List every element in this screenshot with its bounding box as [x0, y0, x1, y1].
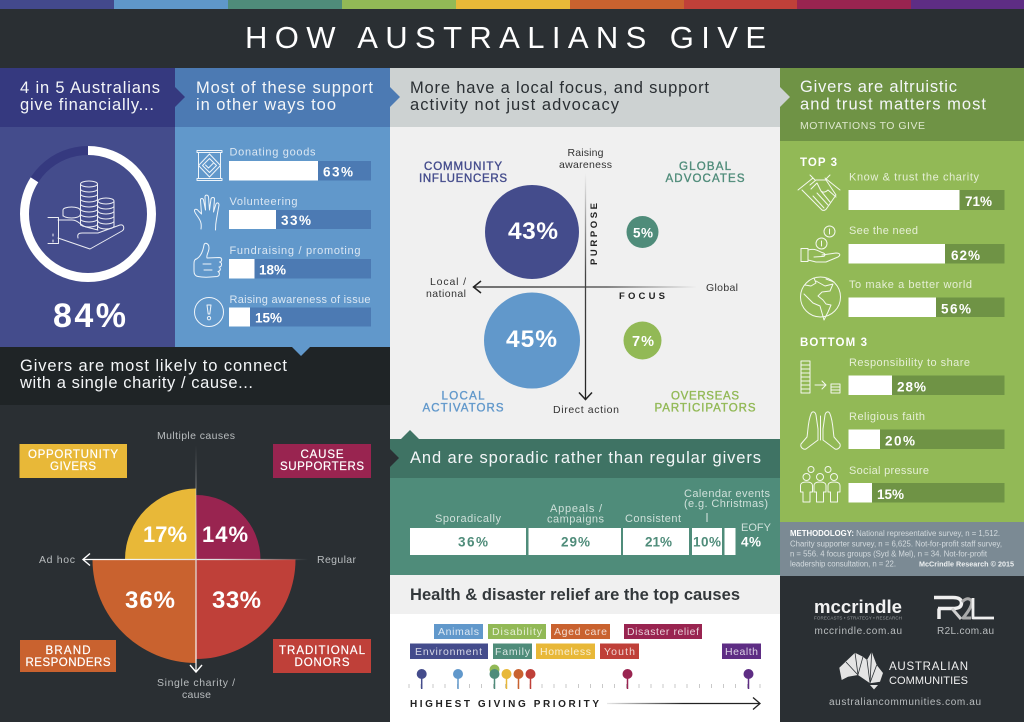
segment labels: INFLUENCERS [419, 173, 507, 185]
logo: Australian Communities: australiancommunities.com.au [829, 697, 981, 708]
heading: Health & disaster relief are the top causes [410, 586, 740, 604]
heading: And are sporadic rather than regular givers [410, 449, 761, 467]
axis labels: Single charity / [157, 677, 235, 689]
segment: cause supporters [196, 495, 260, 560]
label: brand responders: BRAND [46, 645, 90, 657]
bar: donating goods [229, 146, 371, 180]
segment labels: ADVOCATES [666, 173, 745, 185]
bar: religious faith [848, 411, 1004, 449]
label: cause supporters: CAUSE [300, 449, 344, 461]
label: traditional donors [273, 639, 371, 673]
segment: EOFY: EOFY [741, 522, 772, 534]
segment labels [419, 161, 756, 414]
label: opportunity givers: GIVERS [50, 461, 96, 473]
pointer [292, 347, 310, 356]
cause tags: Disaster relief [627, 626, 699, 638]
pointer [780, 87, 790, 107]
segment: calendar events: (e.g. Christmas) [684, 498, 768, 510]
heading: Givers are most likely to connect [20, 357, 287, 375]
segment: brand responders: 36% [125, 587, 175, 614]
axis labels: Local / [430, 276, 466, 288]
bar: raising awareness: Raising awareness of issue [230, 294, 370, 306]
icon: praying hands [801, 412, 840, 449]
segment: sporadically: Sporadically [435, 513, 502, 525]
axis labels [39, 430, 356, 701]
axis labels: Ad hoc [39, 554, 75, 566]
segment: consistent [623, 513, 689, 555]
cause tags: Youth [604, 646, 635, 658]
credit: McCrindle Research © 2015 [919, 560, 1014, 568]
segment: consistent: 21% [645, 534, 672, 550]
bar: better world: To make a better world [849, 279, 972, 291]
label: cause supporters [273, 444, 371, 478]
segment labels: GLOBAL [679, 161, 732, 173]
axes [83, 445, 308, 672]
quadrant chart [419, 147, 756, 416]
panel: motivations [780, 68, 1024, 522]
icon: people [800, 466, 840, 502]
arrow [607, 698, 760, 710]
axis labels: Global [706, 282, 738, 294]
circle: global advocates: 5% [633, 226, 653, 240]
segment: calendar events: Calendar events [684, 488, 770, 500]
bar: volunteering [229, 196, 371, 229]
logo: Australian Communities: AUSTRALIAN [889, 661, 968, 673]
logo: Australian Communities: COMMUNITIES [889, 675, 968, 687]
icon: thumbs up [194, 243, 222, 277]
label: opportunity givers: OPPORTUNITY [28, 449, 118, 461]
axis labels [426, 147, 738, 416]
panel: logos [780, 576, 1024, 722]
bar: see the need: 62% [951, 248, 980, 263]
heading: Most of these support [196, 79, 373, 97]
segment: opportunity givers [125, 488, 196, 560]
pins [417, 664, 754, 689]
label: opportunity givers [20, 444, 127, 478]
bar: fundraising: Fundraising / promoting [230, 245, 360, 257]
title: HOW AUSTRALIANS GIVE [245, 20, 766, 55]
segment: appeals: Appeals / [550, 503, 603, 515]
priority scale [409, 664, 760, 710]
bar: volunteering: 33% [281, 213, 311, 228]
segment labels: LOCAL [442, 390, 485, 402]
panel: methodology [780, 522, 1024, 576]
cause tags: Health [725, 646, 758, 658]
axis labels: Direct action [553, 404, 619, 416]
bar: fundraising: 18% [259, 262, 286, 278]
methodology text: leadership consultation, n = 22. [790, 560, 896, 568]
heading: and trust matters most [800, 96, 986, 114]
logo: R2L [934, 598, 994, 637]
title banner [0, 9, 1024, 68]
circle: community influencers: 43% [508, 218, 558, 245]
cause tags: Homeless [540, 646, 591, 658]
icon: globe [800, 277, 840, 320]
label: traditional donors: DONORS [294, 657, 350, 669]
bar: donating goods: Donating goods [230, 146, 316, 158]
cause tags: Aged care [554, 626, 607, 638]
bar: know and trust: 71% [965, 194, 992, 209]
label: traditional donors: TRADITIONAL [279, 645, 366, 657]
segment: traditional donors: 33% [212, 587, 261, 614]
label: brand responders [20, 640, 116, 672]
bar: see the need: See the need [849, 225, 918, 237]
axes [473, 173, 697, 400]
quarter pie chart [39, 430, 356, 701]
methodology text: n = 556. 4 focus groups (Syd & Mel), n = 34. Not-for-profit [790, 550, 988, 558]
axis labels: national [426, 288, 466, 300]
cause tags: Family [495, 646, 531, 658]
colour stripe [0, 0, 1024, 9]
bar: religious faith: Religious faith [849, 411, 925, 423]
cause tags: Disability [492, 626, 543, 638]
segment: brand responders [92, 560, 196, 663]
bar: know and trust [848, 172, 1004, 210]
logo: R2L: R2L.com.au [937, 626, 994, 637]
bar: better world [848, 279, 1004, 317]
logo: Australian Communities [829, 652, 981, 708]
axis labels: cause [182, 689, 211, 701]
circle: local activators [484, 292, 580, 388]
scale label: HIGHEST GIVING PRIORITY [410, 699, 599, 710]
cause tags: Environment [415, 646, 482, 658]
circle: local activators: 45% [506, 326, 557, 353]
icon: coins share [801, 361, 840, 393]
circle: global advocates [626, 216, 658, 248]
bottom 3 label: BOTTOM 3 [800, 337, 867, 349]
bar: fundraising [229, 245, 371, 278]
axis labels: Raising [568, 147, 604, 159]
icon: hand [194, 195, 219, 230]
segment: calendar events [684, 488, 770, 555]
panel: charity connection [0, 347, 390, 722]
segment: opportunity givers: 17% [143, 522, 187, 547]
logo: mccrindle: mccrindle.com.au [814, 626, 902, 637]
circle: overseas participators [624, 322, 662, 360]
bar: better world: 56% [941, 302, 971, 316]
pointer [390, 449, 399, 467]
segment: cause supporters: 14% [202, 522, 248, 547]
axis labels: FOCUS [619, 291, 665, 302]
methodology text: Charity supporter survey, n = 6,625. Not-for-profit staff survey, [790, 540, 1002, 548]
donut chart [24, 150, 152, 278]
segment: sporadically [410, 513, 526, 555]
methodology text: METHODOLOGY: National representative survey, n = 1,512. [790, 529, 1000, 538]
bar: donating goods: 63% [323, 164, 353, 180]
panel: top causes [390, 575, 780, 722]
subheading: MOTIVATIONS TO GIVE [800, 120, 925, 132]
axis labels: PURPOSE [589, 203, 600, 265]
heading: 4 in 5 Australians [20, 79, 160, 97]
icon: exclamation [194, 298, 224, 326]
circle: community influencers [485, 185, 579, 279]
segment: traditional donors [196, 560, 296, 659]
stat: 84%: 84% [53, 297, 126, 335]
bar: social pressure [848, 465, 1004, 502]
bar: responsibility: Responsibility to share [849, 357, 970, 369]
icon: goods box [197, 150, 222, 180]
icon: handshake [798, 175, 840, 210]
heading: Givers are altruistic [800, 78, 957, 96]
segment labels: ACTIVATORS [422, 402, 504, 414]
bar: see the need [848, 225, 1004, 264]
pointer [390, 87, 400, 107]
cause tags [410, 624, 761, 659]
segment labels: OVERSEAS [671, 390, 739, 402]
axis labels: Multiple causes [157, 430, 235, 442]
bar: responsibility [848, 357, 1004, 395]
bar: responsibility: 28% [897, 380, 926, 394]
panel: give financially [0, 68, 175, 347]
segment: sporadically: 36% [458, 534, 488, 550]
bar: religious faith: 20% [885, 434, 915, 448]
segment: appeals: 29% [561, 534, 590, 550]
bar: know and trust: Know & trust the charity [849, 172, 980, 184]
top 3 label: TOP 3 [800, 157, 837, 169]
segment: appeals: campaigns [547, 514, 604, 526]
heading: More have a local focus, and support [410, 79, 709, 97]
segment labels: COMMUNITY [424, 161, 502, 173]
circle: overseas participators: 7% [632, 334, 654, 350]
segmented bar [410, 488, 772, 555]
panel: sporadic givers [390, 430, 780, 575]
label: cause supporters: SUPPORTERS [280, 461, 364, 473]
segment: appeals [528, 503, 621, 555]
segment: EOFY: 4% [741, 534, 761, 550]
icon: hand with coins [801, 226, 840, 262]
segment: calendar events: 10% [693, 534, 721, 550]
cause tags: Animals [438, 626, 479, 638]
heading: with a single charity / cause... [19, 374, 253, 392]
segment: EOFY [724, 522, 772, 555]
label: brand responders: RESPONDERS [26, 657, 111, 669]
logo: mccrindle: mccrindle [814, 596, 902, 617]
heading: activity not just advocacy [410, 96, 620, 114]
segment labels: PARTICIPATORS [654, 402, 756, 414]
panel: other ways to support [175, 68, 390, 347]
heading: in other ways too [196, 96, 336, 114]
bar: social pressure: 15% [877, 487, 904, 502]
axis labels: awareness [559, 159, 612, 171]
bar: raising awareness [229, 294, 371, 326]
pointer [175, 87, 185, 107]
axis labels: Regular [317, 554, 356, 566]
segment: consistent: Consistent [625, 513, 681, 525]
panel: local focus [390, 68, 780, 439]
logo: mccrindle [814, 596, 902, 637]
heading: give financially... [20, 96, 154, 114]
icon: hand holding coins [48, 181, 124, 249]
bar: social pressure: Social pressure [849, 465, 929, 477]
bar: volunteering: Volunteering [230, 196, 298, 208]
logo: mccrindle: FORECASTS • STRATEGY • RESEARCH [814, 616, 902, 620]
bar: raising awareness: 15% [255, 310, 282, 326]
